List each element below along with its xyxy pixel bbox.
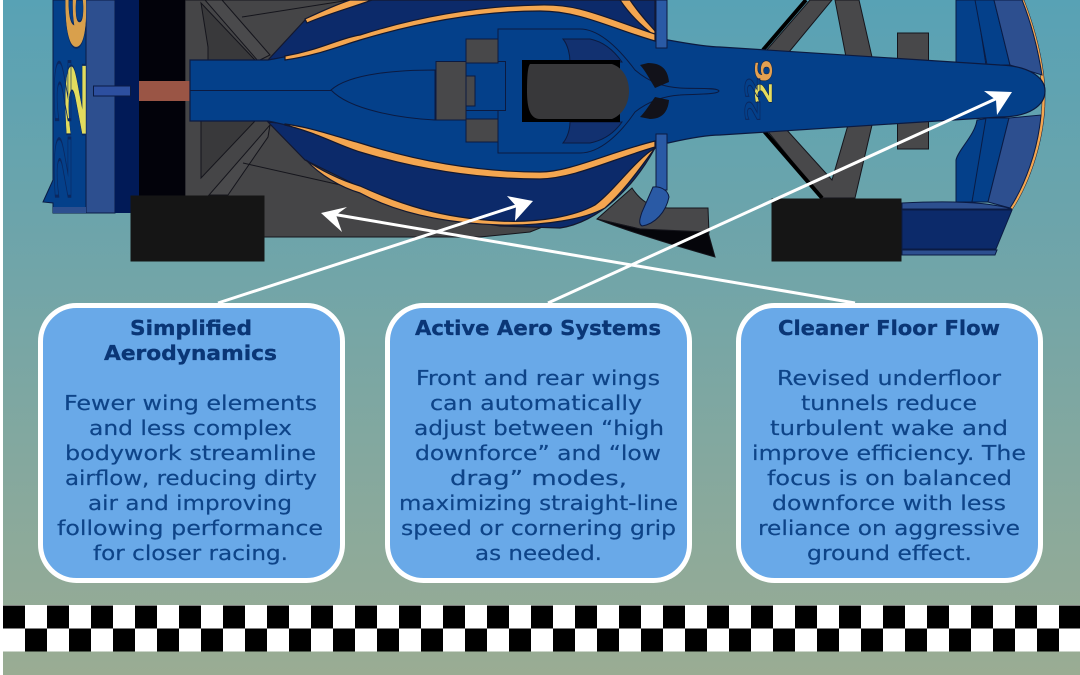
rear tyre [130,196,264,262]
orange stripes [285,5,655,179]
text block: simplified aerodynamics: following performance [57,516,323,540]
text block: active aero systems: downforce” and “low [415,441,661,465]
rear wing 26 logo: 2 [60,53,93,145]
text block: active aero systems: as needed. [475,541,602,565]
main body [190,5,1045,179]
text block: active aero systems: adjust between “high [414,416,664,440]
nose 26 logo: 22 [742,76,765,122]
text block: simplified aerodynamics: airflow, reducing dirty [65,466,317,490]
text block: cleaner floor flow: tunnels reduce [801,391,977,415]
arrow: simplified aerodynamics to sidepod [218,196,533,303]
rear wing 26 logo [50,0,93,205]
front wing [902,0,1045,255]
text block: cleaner floor flow: improve efficiency. The [752,441,1026,465]
text block: cleaner floor flow: ground effect. [807,541,972,565]
text block: simplified aerodynamics: air and improving [88,491,292,515]
rear wing [43,0,185,213]
text block: cleaner floor flow: reliance on aggressive [758,516,1020,540]
panel: simplified aerodynamics [40,306,342,580]
text block: simplified aerodynamics: bodywork streamline [65,441,316,465]
panel: cleaner floor flow [738,306,1040,580]
text block: simplified aerodynamics: for closer racing. [93,541,288,565]
text block: active aero systems [399,366,678,565]
text block: cleaner floor flow: Revised underfloor [777,366,1002,390]
heading: active aero systems: Active Aero Systems [415,316,661,340]
panel: active aero systems [388,306,690,580]
cockpit [436,29,719,153]
bargeboard [597,188,715,257]
text block: cleaner floor flow: focus is on balanced [767,466,1012,490]
floor [185,0,550,237]
sidepods [268,0,655,228]
rear wing pillar [94,86,130,96]
heading: simplified aerodynamics: Aerodynamics [104,341,277,365]
arrow: cleaner floor flow to floor [321,207,855,303]
text block: cleaner floor flow [752,366,1026,565]
text block: active aero systems: speed or cornering grip [401,516,676,540]
heading: simplified aerodynamics: Simplified [130,316,252,340]
nose 26 logo [742,59,777,122]
text block: cleaner floor flow: downforce with less [772,491,1006,515]
heading: simplified aerodynamics [104,316,277,365]
front suspension [763,0,928,198]
arrow: active aero to front wing [548,91,1012,303]
text block: active aero systems: can automatically [430,391,642,415]
text block: simplified aerodynamics: Fewer wing elements [64,391,317,415]
text block: active aero systems: drag” modes, [450,466,627,490]
text block: active aero systems: Front and rear wings [416,366,660,390]
text block: simplified aerodynamics [57,391,323,565]
text block: cleaner floor flow: turbulent wake and [770,416,1008,440]
heading: cleaner floor flow: Cleaner Floor Flow [778,316,1000,340]
rear wing 26 logo: 22 [50,52,76,205]
nose 26 logo: 2 [751,81,777,105]
race car top view [43,0,1045,262]
nose 26 logo: 6 [751,59,777,83]
checkered flag band [3,605,1080,652]
side mirrors and vanes [640,0,669,226]
text block: active aero systems: maximizing straight-line [399,491,678,515]
exhaust [139,81,190,101]
text block: simplified aerodynamics: and less complex [89,416,292,440]
front tyre [772,198,902,262]
